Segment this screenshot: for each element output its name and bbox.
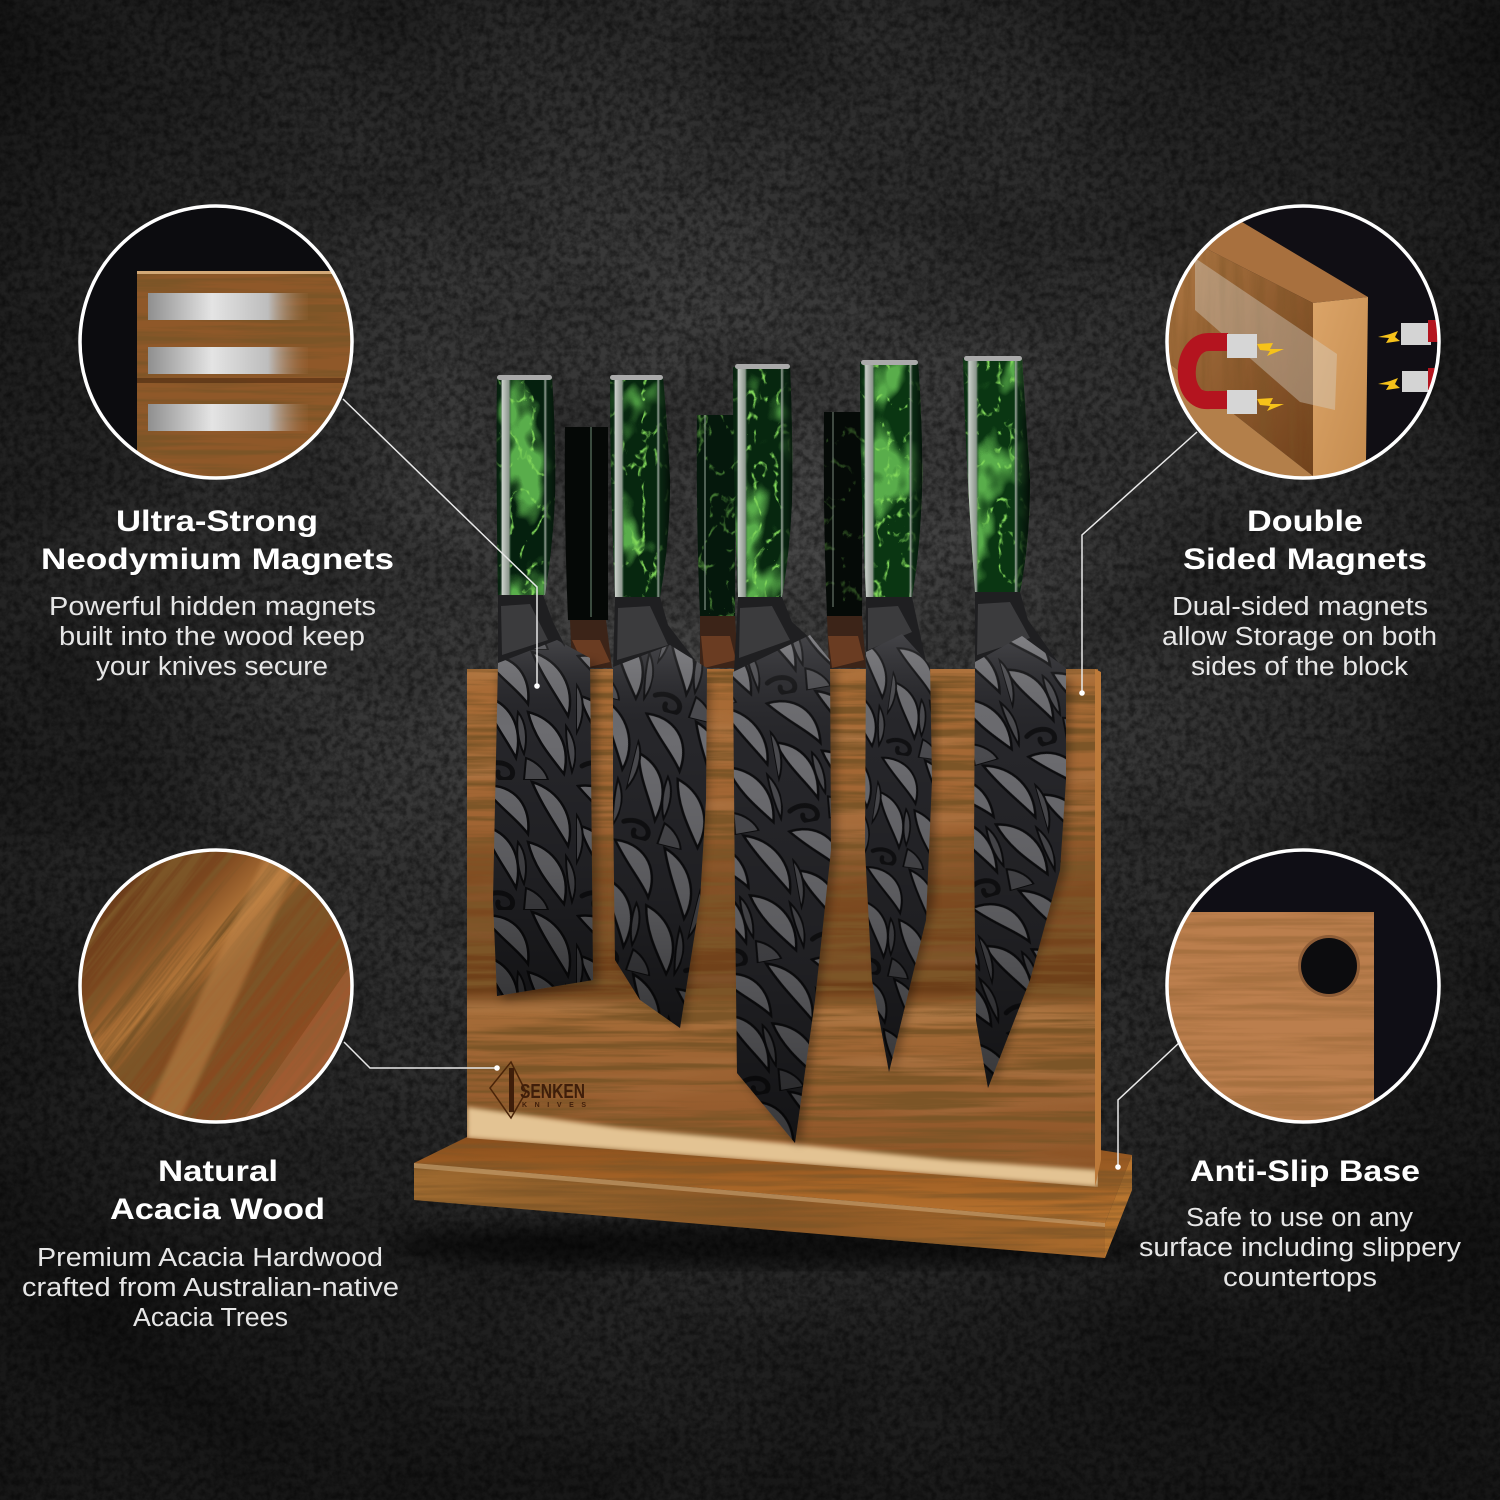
- text block: ultra-strong magnets: your knives secure: [96, 653, 328, 681]
- text block: double sided magnets: allow Storage on both: [1162, 623, 1437, 651]
- leader line: anti-slip base: [1115, 1042, 1180, 1170]
- translucent magnet bar: [1195, 258, 1337, 410]
- block shadow: [390, 1223, 1150, 1267]
- text block: anti-slip base: Anti-Slip Base: [1190, 1155, 1420, 1188]
- small knife 2: [696, 415, 736, 668]
- leader line: double sided: [1079, 432, 1197, 696]
- text block: ultra-strong magnets: Neodymium Magnets: [41, 543, 394, 576]
- text block: natural acacia wood: Acacia Trees: [133, 1304, 288, 1332]
- text block: double sided magnets: Sided Magnets: [1183, 543, 1427, 576]
- engraved logo: KNIVES: [522, 1102, 586, 1109]
- knife 4: slicer: [855, 355, 936, 1075]
- text block: natural acacia wood: Natural: [158, 1155, 278, 1188]
- bolts: [1257, 343, 1284, 356]
- text block: double sided magnets: Dual-sided magnets: [1172, 593, 1428, 621]
- engraved logo: [490, 1062, 586, 1118]
- panel: magnets circle: [78, 204, 357, 481]
- text block: anti-slip base: Safe to use on any: [1186, 1204, 1413, 1232]
- right magnets: [1401, 323, 1431, 345]
- panel: anti-slip base circle: [1165, 848, 1441, 1124]
- text block: natural acacia wood: Acacia Wood: [110, 1193, 325, 1226]
- horseshoe magnet: [1187, 342, 1228, 400]
- rubber foot: [1298, 935, 1360, 997]
- leader line: magnets: [343, 399, 540, 689]
- text block: double sided magnets: [1162, 505, 1437, 681]
- wooden block face: [460, 660, 1110, 1200]
- text block: ultra-strong magnets: Powerful hidden magnets: [49, 593, 376, 621]
- text block: anti-slip base: countertops: [1223, 1264, 1377, 1292]
- base plate: [414, 1137, 1132, 1258]
- engraved logo: SENKEN: [520, 1081, 585, 1103]
- text block: anti-slip base: [1139, 1155, 1461, 1292]
- magnet bars: [148, 293, 308, 320]
- text block: natural acacia wood: Premium Acacia Hardwood: [37, 1244, 383, 1272]
- text block: ultra-strong magnets: Ultra-Strong: [116, 505, 318, 538]
- leader line: acacia wood: [344, 1042, 500, 1071]
- panel: double sided magnets circle: [1165, 204, 1441, 480]
- panel: acacia wood circle: [78, 848, 354, 1124]
- text block: anti-slip base: surface including slippery: [1139, 1234, 1461, 1262]
- knife 5: chef: [958, 350, 1071, 1090]
- text block: double sided magnets: Double: [1247, 505, 1363, 538]
- small knife handles behind: [560, 408, 866, 668]
- knife 3: long chef: [725, 360, 836, 1146]
- knife 2: chef: [600, 370, 710, 1030]
- text block: natural acacia wood: [22, 1155, 399, 1332]
- small knife 1: [564, 427, 612, 668]
- magnetic knife block: [390, 350, 1150, 1267]
- text block: ultra-strong magnets: built into the wood keep: [59, 623, 365, 651]
- small knife 3: [820, 408, 866, 668]
- knife 1: santoku: [490, 370, 598, 1000]
- text block: double sided magnets: sides of the block: [1191, 653, 1408, 681]
- text block: ultra-strong magnets: [41, 505, 394, 681]
- text block: natural acacia wood: crafted from Australian-native: [22, 1274, 399, 1302]
